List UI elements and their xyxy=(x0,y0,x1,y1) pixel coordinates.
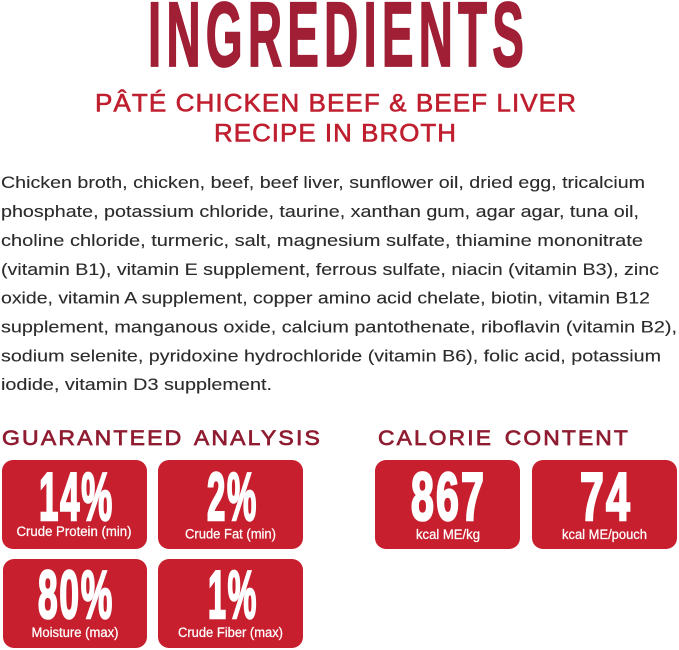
stat card: crude protein: Crude Protein (min) xyxy=(16,524,132,539)
heading: guaranteed analysis: GUARANTEED ANALYSIS xyxy=(2,426,322,450)
stat card: kcal per kg: kcal ME/kg xyxy=(416,527,480,542)
ingredients list: Chicken broth, chicken, beef, beef liver, sunflower oil, dried egg, tricalcium xyxy=(1,173,645,192)
stat card: crude fat: 2% xyxy=(207,459,258,535)
stat card: crude fiber: 1% xyxy=(208,557,258,633)
ingredients list: iodide, vitamin D3 supplement. xyxy=(1,375,272,394)
stat card: crude protein: 14% xyxy=(39,459,114,535)
stat card: crude fat: Crude Fat (min) xyxy=(185,526,276,542)
ingredients list: (vitamin B1), vitamin E supplement, ferrous sulfate, niacin (vitamin B3), zinc xyxy=(1,260,660,279)
ingredients list: sodium selenite, pyridoxine hydrochloride (vitamin B6), folic acid, potassium xyxy=(1,346,661,366)
stat card: kcal per pouch: kcal ME/pouch xyxy=(562,527,647,542)
stat card: moisture: 80% xyxy=(38,557,114,633)
stat card: kcal per pouch: 74 xyxy=(580,459,632,535)
heading: calorie content: CALORIE CONTENT xyxy=(378,426,630,450)
stat card: kcal per pouch xyxy=(532,459,677,549)
stat card: moisture xyxy=(3,557,147,648)
ingredients list: supplement, manganous oxide, calcium pantothenate, riboflavin (vitamin B2), xyxy=(1,318,677,336)
ingredients list: choline chloride, turmeric, salt, magnesium sulfate, thiamine mononitrate xyxy=(1,231,643,250)
ingredients list: oxide, vitamin A supplement, copper amino acid chelate, biotin, vitamin B12 xyxy=(1,288,650,308)
stat card: kcal per kg: 867 xyxy=(411,459,486,535)
stat card: crude protein xyxy=(2,459,147,549)
stat card: kcal per kg xyxy=(375,459,520,549)
stat card: moisture: Moisture (max) xyxy=(32,625,118,640)
subtitle xyxy=(95,88,577,148)
ingredients list: phosphate, potassium chloride, taurine, xanthan gum, agar agar, tuna oil, xyxy=(1,202,639,221)
subtitle: RECIPE IN BROTH xyxy=(214,120,457,148)
stat card: crude fiber: Crude Fiber (max) xyxy=(178,625,283,640)
subtitle: PÂTÉ CHICKEN BEEF & BEEF LIVER xyxy=(95,88,577,118)
stat card: crude fiber xyxy=(158,557,303,648)
stat card: crude fat xyxy=(158,459,303,549)
ingredients list xyxy=(1,173,677,394)
